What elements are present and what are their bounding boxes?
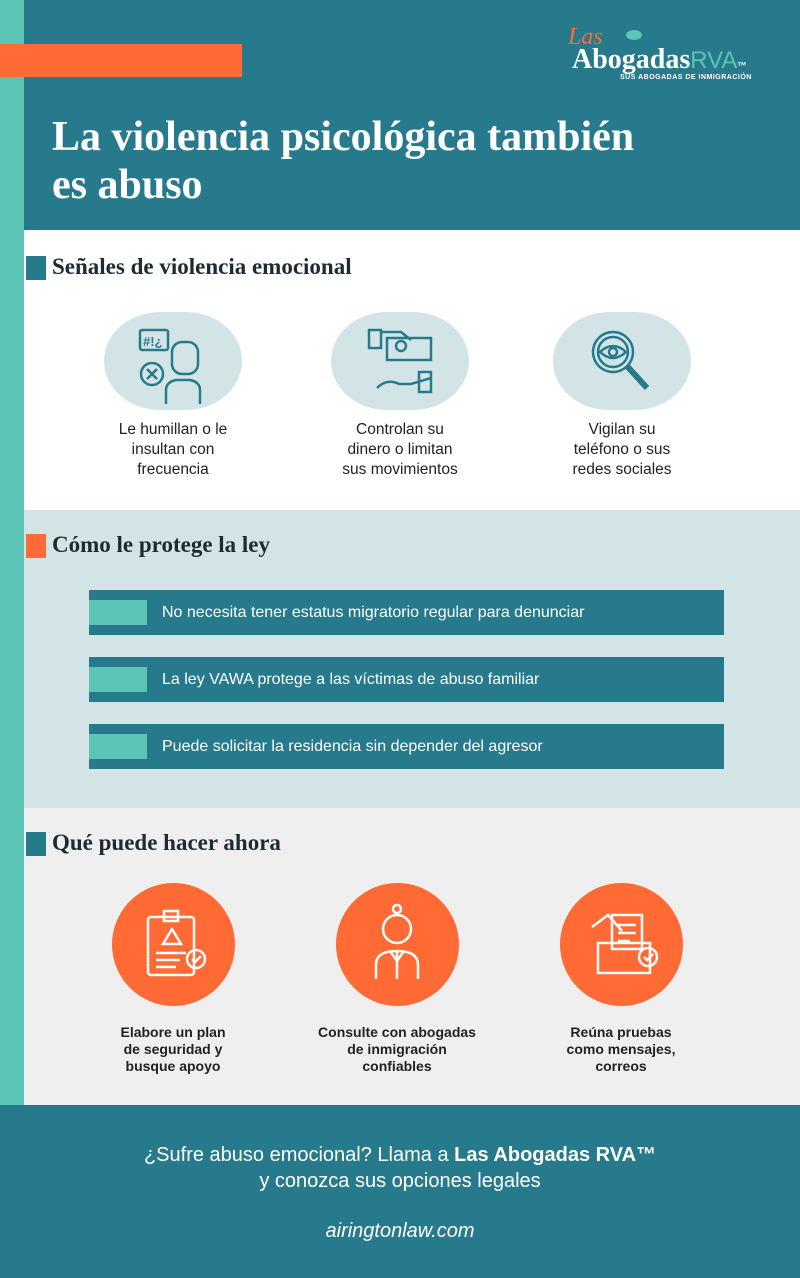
bar 1 [89,590,724,635]
icon: money hands [331,312,469,410]
logo: SUS ABOGADAS DE INMIGRACIÓN [620,74,752,81]
bar 1: No necesita tener estatus migratorio regular para denunciar [162,604,584,621]
icon: magnifier eye [553,312,691,410]
bar 2: La ley VAWA protege a las víctimas de abuso familiar [162,671,539,688]
orange bar [0,44,242,77]
icon: person insult [104,312,242,410]
bar 3: Puede solicitar la residencia sin depender del agresor [162,738,543,755]
call to action: y conozca sus opciones legales [259,1170,541,1192]
icon: clipboard [112,883,235,1006]
text: correos [595,1058,647,1074]
heading: Qué puede hacer ahora [52,830,281,855]
logo: AbogadasRVA™ [572,44,746,75]
text: signs labels: frecuencia [137,461,209,478]
heading: Señales de violencia emocional [52,254,352,279]
text: Vigilan su [589,421,655,438]
text: teléfono o sus [574,441,670,458]
bar 2 [89,657,724,702]
bar 3 [89,724,724,769]
text: signs labels: insultan con [132,441,214,458]
text: dinero o limitan [347,441,453,458]
text: sus movimientos [342,461,458,478]
text: Reúna pruebas [570,1024,672,1040]
logo [568,24,752,81]
title: La violencia psicológica también [52,114,634,160]
text: redes sociales [572,461,672,478]
text: como mensajes, [567,1041,675,1057]
panel: actions [24,808,800,1105]
text: de inmigración [347,1041,447,1057]
panel: signs [26,254,352,280]
text: Consulte con abogadas [318,1024,476,1040]
panel: law [24,510,800,808]
text: confiables [362,1058,432,1074]
footer [0,1105,800,1278]
text: signs labels: Le humillan o le [119,421,227,438]
text: action labels [120,1024,226,1074]
icon: lawyer [336,883,459,1006]
title: es abuso [52,162,203,208]
call to action: ¿Sufre abuso emocional? Llama a Las Abogadas RVA™ [144,1144,656,1166]
text: action labels: de seguridad y [124,1041,222,1057]
call to action [144,1144,656,1192]
icon: person insult: #!¿ [143,334,163,349]
icon: folder docs [560,883,683,1006]
logo: Las [568,24,603,50]
website: airingtonlaw.com [326,1220,474,1242]
text: action labels: busque apoyo [126,1058,220,1074]
header [0,0,800,230]
text: Controlan su [356,421,444,438]
title [52,114,634,208]
text: action labels: Elabore un plan [120,1024,226,1040]
text: signs labels [119,421,227,478]
heading: Cómo le protege la ley [52,532,270,557]
left strip [0,0,24,1105]
